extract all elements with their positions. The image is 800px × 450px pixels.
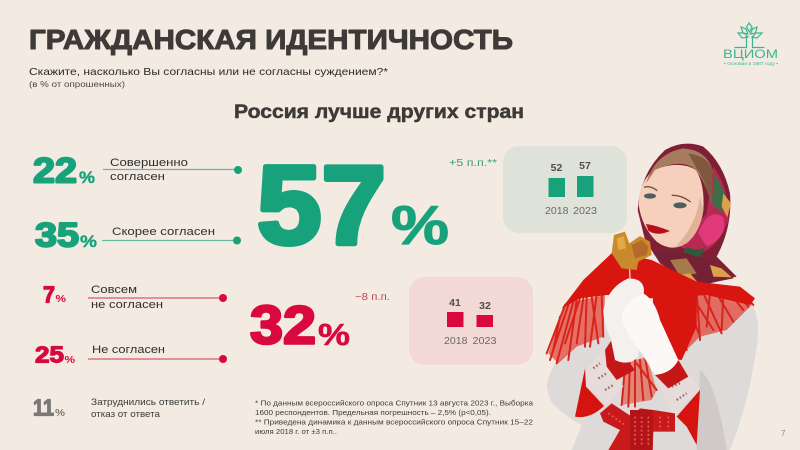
- total disagree: 32%: 32: [250, 296, 316, 356]
- coat: [547, 297, 758, 450]
- red shawl: [562, 252, 755, 308]
- page number: 7: [781, 429, 786, 438]
- footnotes: [255, 398, 534, 436]
- logo: ВЦИОМ: • Основан в 1987 году •: [724, 61, 779, 66]
- bar chart: agree: 2023: [573, 206, 597, 217]
- bar chart: disagree: 32: [479, 300, 491, 312]
- centre of shawl under hands: [650, 290, 697, 360]
- footnotes: ** Приведена динамика к данным всероссийского опроса Спутник 15–22: [255, 418, 533, 426]
- illustration: woman in headscarf: [547, 144, 758, 450]
- survey question: [29, 66, 388, 89]
- stat: 11% undecided: отказ от ответа: [91, 409, 161, 420]
- hair: [646, 148, 713, 205]
- total agree: 57%: %: [391, 194, 449, 256]
- stat: 22% fully agree: %: [79, 168, 95, 187]
- bar chart: disagree: 2023: [472, 336, 497, 347]
- title: ГРАЖДАНСКАЯ ИДЕНТИЧНОСТЬ: [29, 24, 513, 55]
- logo: ВЦИОМ: [723, 23, 779, 66]
- stat: 11% undecided: [33, 394, 205, 420]
- survey question: Скажите, насколько Вы согласны или не согласны суждением?*: [29, 66, 388, 78]
- red belt: [600, 403, 675, 450]
- stat: 35% rather agree: 35: [35, 216, 79, 254]
- shawl fringes: [547, 292, 753, 407]
- logo: ВЦИОМ: ВЦИОМ: [723, 49, 778, 61]
- stat: 22% fully agree: Совершенно: [110, 157, 188, 169]
- bar chart: disagree: 2018: [444, 336, 468, 347]
- icon: tree: [734, 23, 764, 48]
- footnotes: июля 2018 г. от ±3 п.п..: [255, 427, 337, 436]
- stat: 22% fully agree: 22: [33, 152, 77, 190]
- candy on a stick: [612, 232, 652, 278]
- lace cuffs: [586, 350, 699, 417]
- panel: disagree dynamics: [409, 277, 533, 365]
- stat: 22% fully agree: [33, 152, 242, 190]
- stat: 11% undecided: Затруднились ответить /: [91, 397, 205, 408]
- stat: 25% disagree: 25: [35, 342, 64, 368]
- stat: 7% strongly disagree: %: [56, 293, 67, 305]
- bar chart: disagree: [444, 297, 497, 347]
- red wrist bows: [605, 340, 635, 380]
- chart heading: Россия лучше других стран: [234, 101, 524, 123]
- bar chart: agree: 2018: [545, 206, 569, 217]
- stat: 7% strongly disagree: 7: [43, 282, 55, 308]
- stat: 35% rather agree: [35, 216, 241, 254]
- bar chart: agree: 57: [579, 160, 591, 172]
- total disagree: 32%: %: [318, 317, 350, 352]
- bar chart: disagree: 41: [449, 297, 461, 309]
- stat: 7% strongly disagree: Совсем: [91, 284, 137, 296]
- total disagree: 32%: [250, 296, 350, 356]
- footnotes: * По данным всероссийского опроса Спутник 13 августа 2023 г., Выборка: [255, 398, 534, 408]
- mittens: [603, 278, 644, 363]
- eyes and brows: [644, 187, 691, 202]
- stat: 11% undecided: 11: [33, 394, 54, 420]
- bar chart: agree: [545, 160, 597, 217]
- change label: +5: +5 п.п.**: [449, 158, 497, 169]
- change label: -8: −8 п.п.: [355, 292, 390, 303]
- footnotes: 1600 респондентов. Предельная погрешность – 2,5% (p<0,05).: [255, 408, 491, 417]
- panel: agree dynamics: [503, 146, 627, 233]
- bar chart: agree: 52: [551, 162, 562, 174]
- face: [639, 165, 704, 248]
- stat: 25% disagree: %: [64, 354, 76, 366]
- stat: 35% rather agree: Скорее согласен: [112, 226, 215, 238]
- total agree: 57%: 57: [257, 144, 386, 268]
- lips: [646, 224, 670, 234]
- stat: 7% strongly disagree: не согласен: [91, 299, 163, 311]
- stat: 35% rather agree: %: [80, 232, 97, 251]
- scarf back: [638, 144, 737, 287]
- stat: 22% fully agree: согласен: [110, 171, 165, 183]
- stat: 25% disagree: [35, 342, 227, 368]
- stat: 11% undecided: %: [55, 407, 66, 419]
- survey question: (в % от опрошенных): [29, 79, 125, 89]
- stat: 25% disagree: Не согласен: [92, 344, 165, 356]
- red sleeve linings: [575, 368, 604, 417]
- stat: 7% strongly disagree: [43, 282, 227, 311]
- total agree: 57%: [257, 144, 449, 268]
